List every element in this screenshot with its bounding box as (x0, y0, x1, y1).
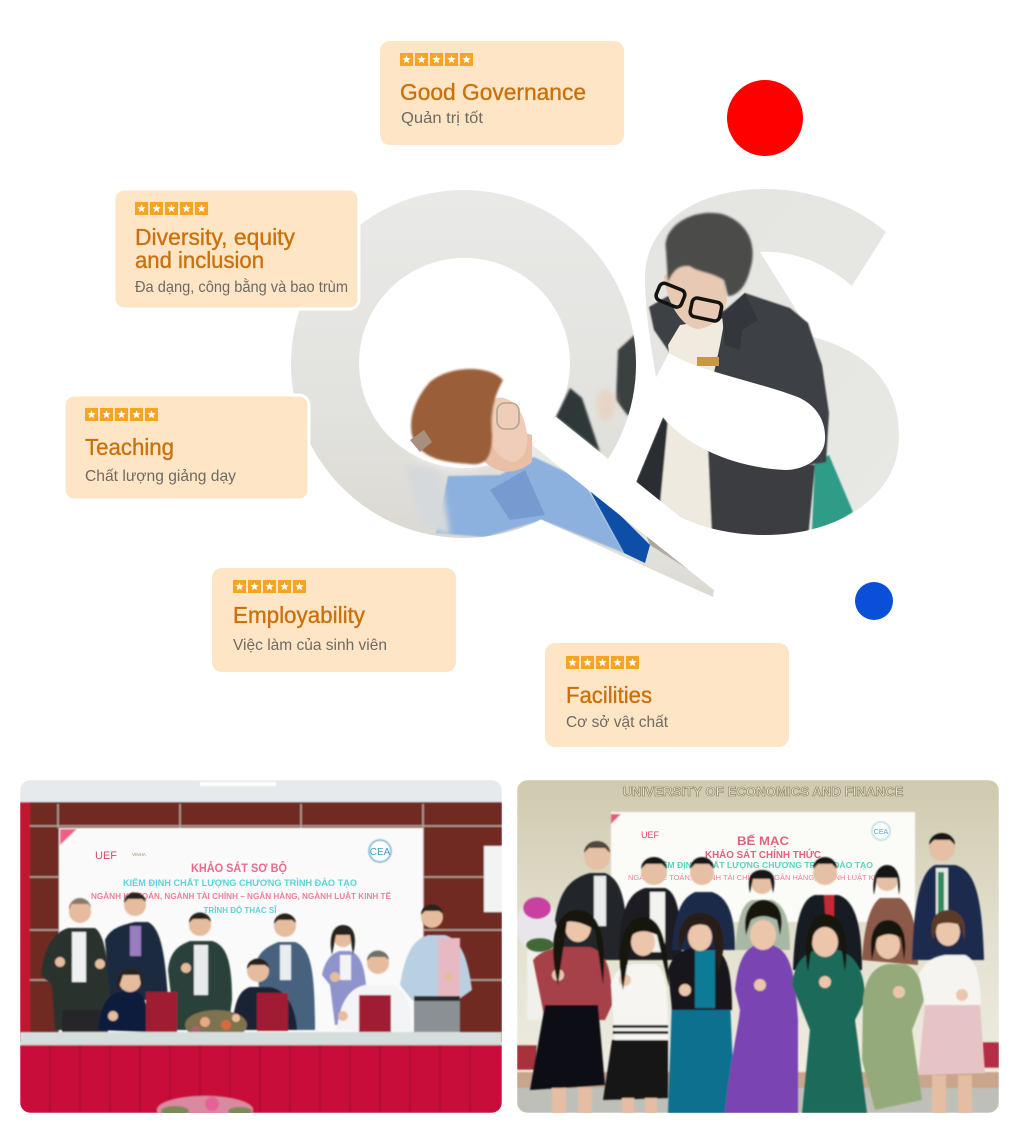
rating stars (566, 656, 639, 669)
screen text: VINHA (132, 852, 146, 857)
photo: man in suit (396, 213, 853, 600)
card: Facilities (545, 643, 789, 747)
screen text: UEF (95, 850, 117, 862)
wall sign and screen text: UNIVERSITY OF ECONOMICS AND FINANCE (622, 785, 904, 799)
screen text (91, 847, 391, 915)
people group (20, 892, 502, 1124)
red circle (727, 80, 803, 156)
subtitle: Chất lượng giảng dạy (85, 468, 236, 485)
screen text: NGÀNH KẾ TOÁN, NGÀNH TÀI CHÍNH – NGÂN HÀNG, NGÀNH LUẬT KINH TẾ (91, 890, 391, 901)
title: Diversity, equity (135, 224, 295, 250)
wall sign and screen text (622, 785, 904, 882)
subtitle: Quản trị tốt (401, 110, 484, 127)
blue circle (855, 582, 893, 620)
card: Employability (212, 568, 456, 672)
screen text: KIỂM ĐỊNH CHẤT LƯỢNG CHƯƠNG TRÌNH ĐÀO TẠO (123, 877, 357, 888)
title: Facilities (566, 682, 652, 708)
card: Teaching (64, 395, 309, 500)
title second line: and inclusion (135, 247, 264, 273)
letter Q (291, 190, 714, 597)
card: Good Governance (380, 41, 624, 145)
QS letters with photo fill (291, 189, 899, 600)
people group (530, 833, 985, 1113)
rating stars (85, 408, 158, 421)
photo: woman in blue shirt (396, 352, 720, 590)
title: Employability (233, 602, 365, 628)
rating stars (135, 202, 208, 215)
white gap: Q tail slash (532, 417, 730, 600)
title: Good Governance (400, 79, 586, 105)
letter S (636, 189, 899, 535)
wall sign and screen text: BẾ MẠC (737, 833, 789, 848)
wall sign and screen text: UEF (641, 830, 660, 840)
title: Teaching (85, 434, 174, 460)
photo: group portrait (517, 780, 999, 1113)
rating stars (233, 580, 306, 593)
white gap: S lower counter (652, 353, 825, 470)
screen text: KHẢO SÁT SƠ BỘ (191, 862, 287, 875)
wall sign and screen text: CEA (874, 829, 889, 836)
wall sign and screen text: KHẢO SÁT CHÍNH THỨC (705, 848, 821, 861)
rating stars (400, 53, 473, 66)
photo: signing ceremony (20, 780, 502, 1124)
subtitle: Việc làm của sinh viên (233, 637, 387, 654)
wall sign and screen text: KIỂM ĐỊNH CHẤT LƯỢNG CHƯƠNG TRÌNH ĐÀO TẠO (653, 859, 873, 870)
subtitle: Cơ sở vật chất (566, 714, 669, 731)
wall sign and screen text: NGÀNH KẾ TOÁN, NGÀNH TÀI CHÍNH – NGÂN HÀNG, NGÀNH LUẬT KINH TẾ (628, 872, 898, 882)
front row (533, 947, 612, 1020)
card: Diversity, equity and inclusion (114, 189, 359, 309)
screen text: CEA (370, 847, 391, 858)
subtitle: Đa dạng, công bằng và bao trùm (135, 277, 348, 296)
screen text: TRÌNH ĐỘ THẠC SĨ (204, 906, 277, 915)
